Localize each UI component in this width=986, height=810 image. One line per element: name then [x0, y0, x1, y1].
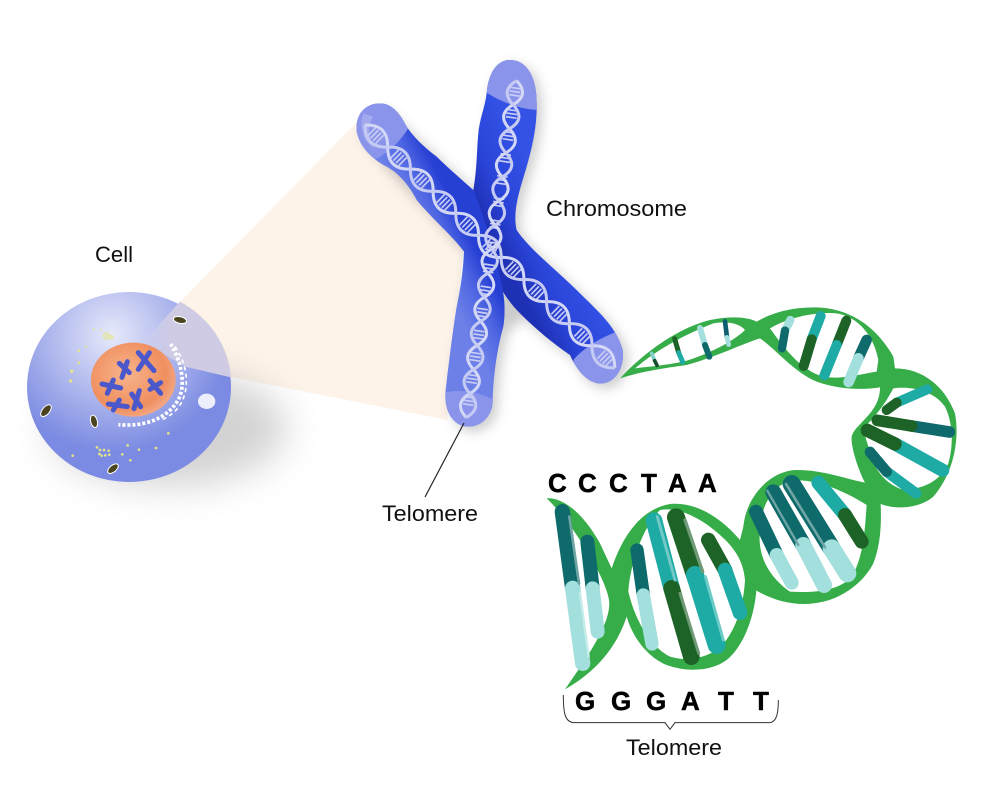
white lobe lower [628, 509, 745, 659]
label: Telomere on chromosome: Telomere [382, 501, 478, 526]
vesicle [198, 394, 215, 409]
DNA on chromosome, diagonal [359, 119, 624, 377]
mitochondria [39, 315, 187, 475]
chromosome [356, 60, 633, 436]
golgi apparatus [118, 344, 186, 425]
brace under telomere [563, 695, 778, 729]
cell [27, 292, 286, 486]
yellow granules [69, 328, 170, 462]
nucleus chromosomes [102, 353, 161, 410]
DNA on chromosome, vertical [459, 80, 524, 419]
white lobes upper [635, 313, 952, 592]
chromatid left [356, 103, 505, 427]
base pair rungs lower [562, 483, 862, 663]
base pair rungs upper [652, 316, 949, 493]
zoom cone from cell to chromosome [180, 122, 463, 420]
label: Telomere on DNA: Telomere [626, 735, 722, 760]
helix ribbon lower [547, 498, 757, 689]
base sequence bottom: GGGATT [575, 686, 769, 716]
chromatid right [473, 60, 623, 384]
label: Cell: Cell [95, 242, 133, 267]
DNA double helix [547, 307, 957, 689]
telomere leader line [425, 423, 464, 497]
base sequence top: CCCTAA [548, 468, 717, 498]
helix ribbon upper [620, 307, 957, 604]
label: Chromosome: Chromosome [546, 196, 687, 221]
